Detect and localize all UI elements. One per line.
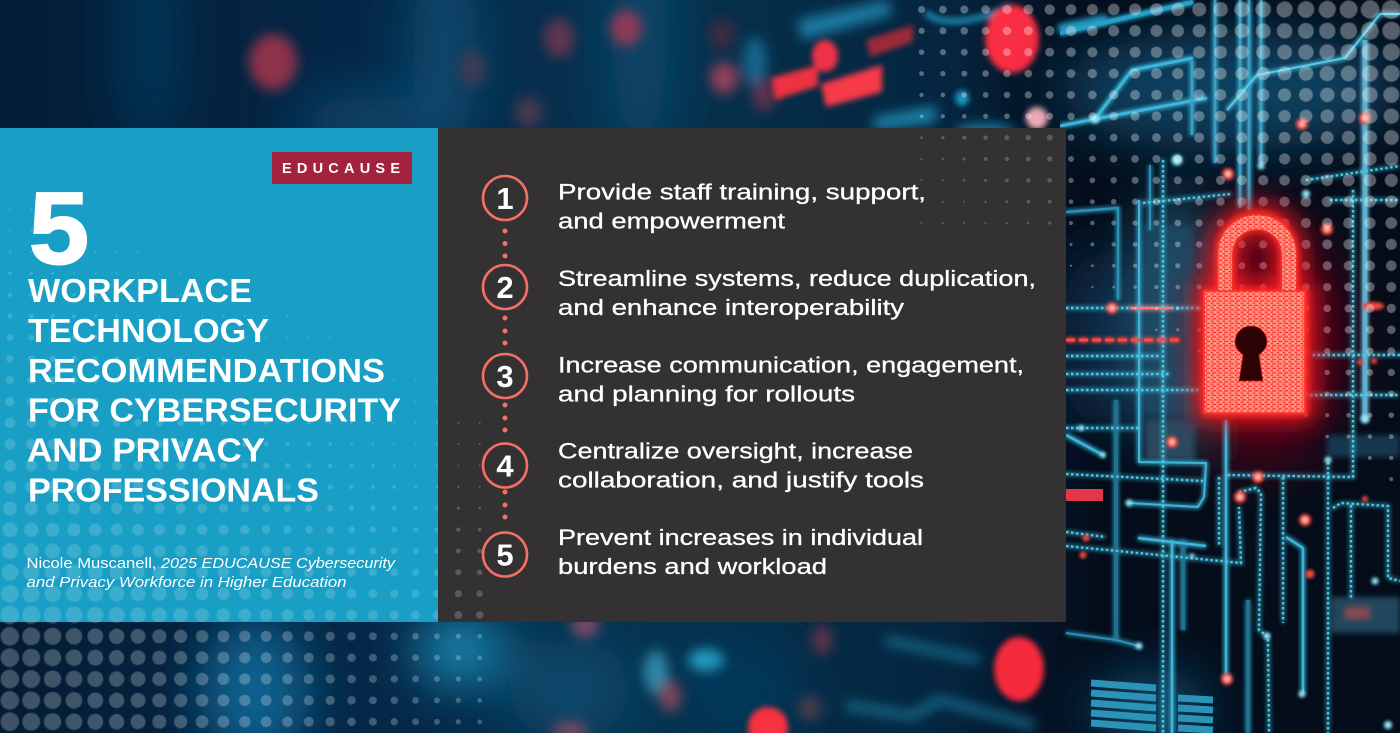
dotted connectors (502, 228, 508, 520)
big number 5: 5 (29, 172, 89, 286)
number badge 5 (483, 532, 527, 576)
heading: TECHNOLOGY (28, 312, 269, 349)
panel: recommendations (dark) (438, 128, 1070, 622)
heading: FOR CYBERSECURITY (28, 392, 401, 428)
heading: AND PRIVACY (27, 432, 265, 468)
cyan node lights (1078, 114, 1392, 729)
icon: glowing red padlock (1196, 217, 1314, 420)
recommendation 5: Prevent increases in individual (558, 525, 923, 550)
red accent bar (1066, 489, 1103, 501)
number badge 1 (483, 176, 527, 220)
recommendation 3 (558, 352, 1024, 406)
heading: PROFESSIONALS (28, 472, 319, 508)
halftone dots on blue panel (0, 208, 438, 622)
recommendation 2: Streamline systems, reduce duplication, (558, 266, 1036, 291)
number badge 1: 1 (496, 181, 514, 216)
number badge 4 (483, 444, 527, 488)
number badge 4: 4 (496, 448, 514, 484)
blue data bars (1091, 683, 1213, 730)
recommendation 1: and empowerment (558, 208, 786, 234)
citation: and Privacy Workforce in Higher Education (26, 575, 346, 591)
recommendation 3: Increase communication, engagement, (558, 352, 1024, 378)
heading: RECOMMENDATIONS (28, 352, 385, 389)
recommendation 4: collaboration, and justify tools (558, 468, 924, 492)
recommendation 2: and enhance interoperability (558, 295, 905, 320)
red node lights (1080, 112, 1384, 685)
recommendation 1 (558, 180, 926, 234)
halftone dots lower left background (0, 622, 490, 733)
logo: EDUCAUSE (272, 152, 412, 184)
recommendation 3: and planning for rollouts (558, 382, 855, 406)
photo: circuit board with glowing lines (1060, 0, 1400, 733)
heading (27, 272, 401, 508)
recommendation 1: Provide staff training, support, (558, 180, 926, 204)
recommendation 4 (558, 438, 924, 492)
recommendation 5: burdens and workload (558, 554, 827, 579)
halftone dots on photo (918, 0, 1400, 482)
citation: 2025 EDUCAUSE Cybersecurity (160, 556, 396, 572)
number badge 5: 5 (496, 538, 514, 572)
halftone dots lower left of dark panel (454, 422, 484, 619)
halftone dots upper right of dark panel (920, 134, 1053, 225)
recommendation 5 (558, 525, 923, 579)
recommendation 4: Centralize oversight, increase (558, 438, 913, 464)
recommendation 2 (558, 266, 1036, 320)
citation (26, 556, 396, 591)
number badge 2: 2 (496, 270, 514, 305)
number badge 2 (483, 265, 527, 309)
panel: title (blue) (0, 128, 438, 622)
citation: Nicole Muscanell, (26, 556, 156, 572)
number badge 3: 3 (496, 359, 514, 394)
heading: WORKPLACE (28, 272, 252, 309)
logo: EDUCAUSE: EDUCAUSE (282, 161, 400, 177)
glowing circuit lines (1060, 0, 1400, 733)
number badge 3 (483, 354, 527, 398)
